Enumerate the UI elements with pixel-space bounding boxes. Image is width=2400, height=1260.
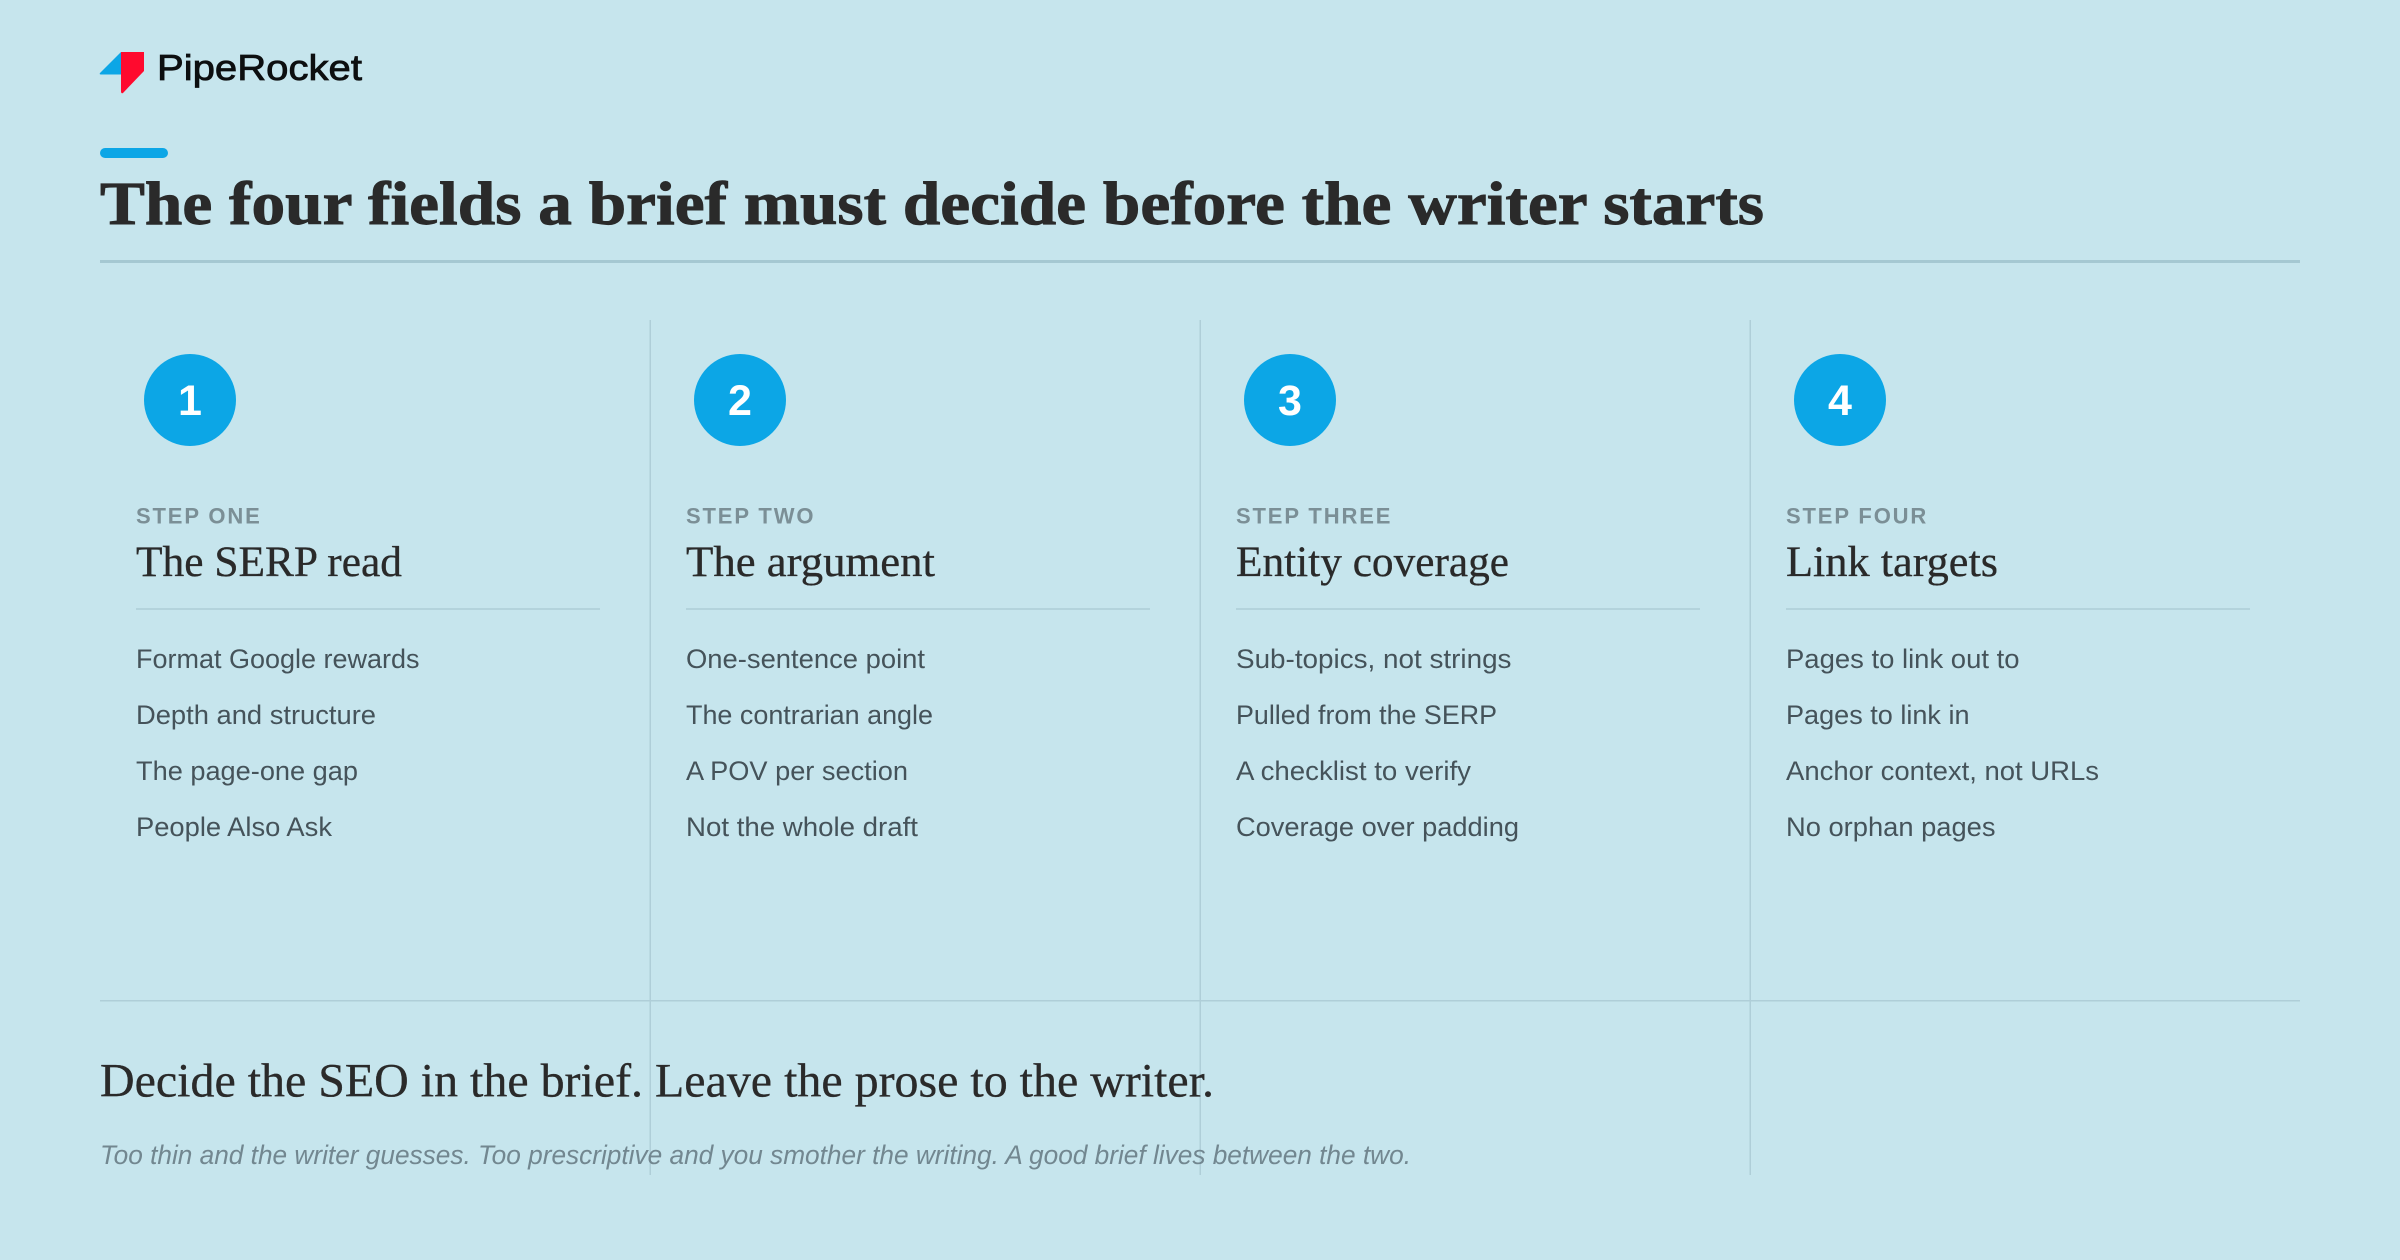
step list: Anchor context, not URLs [1786,756,2099,786]
step list: Pulled from the SERP [1236,700,1497,730]
step number badge [694,354,786,446]
closing statement: Decide the SEO in the brief. Leave the prose to the writer. [100,1056,1214,1108]
step heading: The argument [686,539,935,586]
panel: step four [1786,354,2250,842]
title: The four fields a brief must decide before the writer starts [100,171,1764,238]
title accent bar [100,148,168,158]
step label: STEP ONE [136,504,262,528]
step number badge: 4 [1828,377,1852,425]
step list [136,644,420,842]
step list: A checklist to verify [1236,756,1471,786]
step list: One-sentence point [686,644,925,674]
step list: Format Google rewards [136,644,420,674]
step list: Depth and structure [136,700,376,730]
panel: step three [1236,354,1700,842]
step heading: The SERP read [136,539,402,586]
step heading: Link targets [1786,539,1998,586]
step label: STEP THREE [1236,504,1392,528]
step list: People Also Ask [136,812,332,842]
icon: logo mark [100,52,144,93]
step list: No orphan pages [1786,812,1996,842]
step list [1236,644,1519,842]
step number badge: 3 [1278,377,1302,425]
step heading: Entity coverage [1236,539,1509,586]
step number badge: 2 [728,377,752,425]
step list: Sub-topics, not strings [1236,644,1512,674]
step list: Pages to link in [1786,700,1970,730]
step list [686,644,933,842]
panel: step two [686,354,1150,842]
brand logo [100,47,362,93]
closing note: Too thin and the writer guesses. Too prescriptive and you smother the writing. A good brief lives between the two. [100,1140,1411,1170]
step number badge: 1 [178,377,202,425]
step number badge [1794,354,1886,446]
panel: step one [136,354,600,842]
step number badge [144,354,236,446]
step list: Coverage over padding [1236,812,1519,842]
step list: Pages to link out to [1786,644,2020,674]
step label: STEP FOUR [1786,504,1928,528]
step list [1786,644,2099,842]
step list: The contrarian angle [686,700,933,730]
step list: The page-one gap [136,756,358,786]
title rule [100,260,2300,263]
step label: STEP TWO [686,504,815,528]
step list: Not the whole draft [686,812,918,842]
brand name: PipeRocket [157,47,362,88]
step list: A POV per section [686,756,908,786]
step number badge [1244,354,1336,446]
